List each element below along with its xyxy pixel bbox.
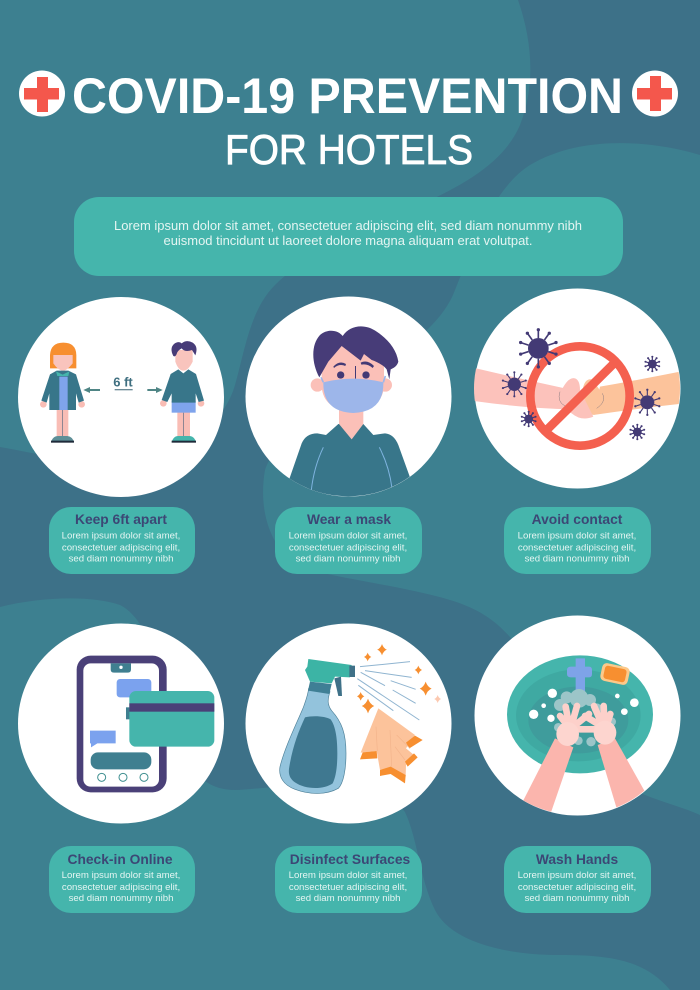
caption pill: Wash Hands xyxy=(536,852,618,867)
panel: keep 6ft apart xyxy=(18,297,224,574)
caption pill: Lorem ipsum dolor sit amet, xyxy=(518,870,636,881)
circle xyxy=(474,616,680,816)
foam xyxy=(554,689,616,746)
viruses xyxy=(502,328,660,440)
caption pill xyxy=(49,507,195,574)
icon: red cross left xyxy=(19,70,65,116)
caption pill: Keep 6ft apart xyxy=(75,512,167,527)
caption pill: sed diam nonummy nibh xyxy=(525,893,629,904)
bubbles xyxy=(529,689,639,722)
circle xyxy=(246,624,452,824)
faucet xyxy=(567,658,592,693)
phone xyxy=(77,656,167,792)
caption pill: sed diam nonummy nibh xyxy=(69,554,173,564)
title xyxy=(19,68,678,173)
caption pill: Wear a mask xyxy=(307,512,391,527)
hair xyxy=(313,326,398,379)
prohibition sign xyxy=(530,346,630,446)
illustration: phone and card xyxy=(77,656,214,792)
intro banner: euismod tincidunt ut laoreet dolore magna aliquam erat volutpat. xyxy=(164,233,532,248)
circle xyxy=(18,297,224,497)
caption pill: Check-in Online xyxy=(67,852,173,867)
caption pill xyxy=(275,507,422,574)
eyes xyxy=(333,362,374,379)
caption pill: consectetuer adipiscing elit, xyxy=(518,882,636,893)
caption pill: consectetuer adipiscing elit, xyxy=(518,542,636,554)
distance label: 6 ft xyxy=(113,374,133,389)
caption pill: Disinfect Surfaces xyxy=(290,852,411,867)
caption pill: Lorem ipsum dolor sit amet, xyxy=(289,870,407,881)
caption pill: Lorem ipsum dolor sit amet, xyxy=(289,530,407,542)
arrow: right xyxy=(147,387,163,393)
arms and hands xyxy=(472,367,685,419)
caption pill: consectetuer adipiscing elit, xyxy=(289,882,407,893)
circle xyxy=(474,288,680,488)
caption pill xyxy=(504,846,651,913)
circle xyxy=(18,624,224,824)
figure: woman xyxy=(40,343,85,443)
illustration: man wearing mask xyxy=(287,326,413,503)
cleaning cloth xyxy=(360,708,423,783)
caption pill: Lorem ipsum dolor sit amet, xyxy=(62,870,180,881)
caption pill xyxy=(504,507,651,574)
panel: disinfect surfaces xyxy=(246,624,452,913)
panel: check-in online xyxy=(18,624,224,913)
intro banner xyxy=(74,197,623,276)
spray lines xyxy=(357,662,419,720)
caption pill: sed diam nonummy nibh xyxy=(69,893,173,904)
circle xyxy=(246,296,452,496)
payment card xyxy=(129,691,214,747)
figure: man xyxy=(160,341,204,443)
arrow: left xyxy=(83,387,100,393)
illustration: spray and cloth xyxy=(280,644,441,793)
spray bottle xyxy=(280,659,355,793)
panel: avoid contact xyxy=(472,288,685,574)
sink basin xyxy=(507,655,653,773)
caption pill: sed diam nonummy nibh xyxy=(525,554,629,564)
soap xyxy=(599,662,631,686)
body xyxy=(290,424,410,496)
caption pill: sed diam nonummy nibh xyxy=(296,554,400,564)
caption pill xyxy=(49,846,195,913)
panel: wash hands xyxy=(474,616,680,913)
caption pill: sed diam nonummy nibh xyxy=(296,893,400,904)
caption pill: consectetuer adipiscing elit, xyxy=(62,882,180,893)
heading line two: FOR HOTELS xyxy=(225,126,473,173)
illustration: two people six feet apart xyxy=(40,341,204,443)
icon: red cross right xyxy=(632,70,678,116)
caption pill: Lorem ipsum dolor sit amet, xyxy=(62,530,180,542)
distance underline xyxy=(115,389,133,390)
caption pill: Avoid contact xyxy=(532,512,623,527)
sparkles xyxy=(357,644,441,713)
heading line one: COVID-19 PREVENTION xyxy=(72,68,623,124)
mask xyxy=(323,379,383,413)
arms and hands xyxy=(523,702,644,812)
illustration: hands in sink xyxy=(507,655,653,825)
illustration: no handshake xyxy=(472,328,685,446)
caption pill: consectetuer adipiscing elit, xyxy=(62,542,180,554)
panel: wear a mask xyxy=(246,296,452,574)
caption pill: Lorem ipsum dolor sit amet, xyxy=(518,530,636,542)
caption pill: consectetuer adipiscing elit, xyxy=(289,542,407,554)
intro banner: Lorem ipsum dolor sit amet, consectetuer adipiscing elit, sed diam nonummy nibh xyxy=(114,218,582,233)
caption pill xyxy=(275,846,422,913)
